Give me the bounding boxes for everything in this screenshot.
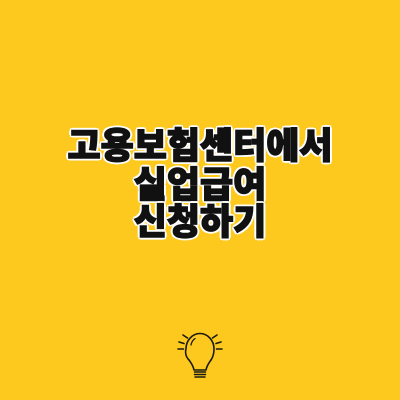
title xyxy=(66,124,332,242)
icon: light bulb xyxy=(177,332,223,378)
title: 신청하기 xyxy=(134,201,266,242)
title: 고용보험센터에서 xyxy=(68,125,332,166)
title: 실업급여 xyxy=(134,164,266,205)
